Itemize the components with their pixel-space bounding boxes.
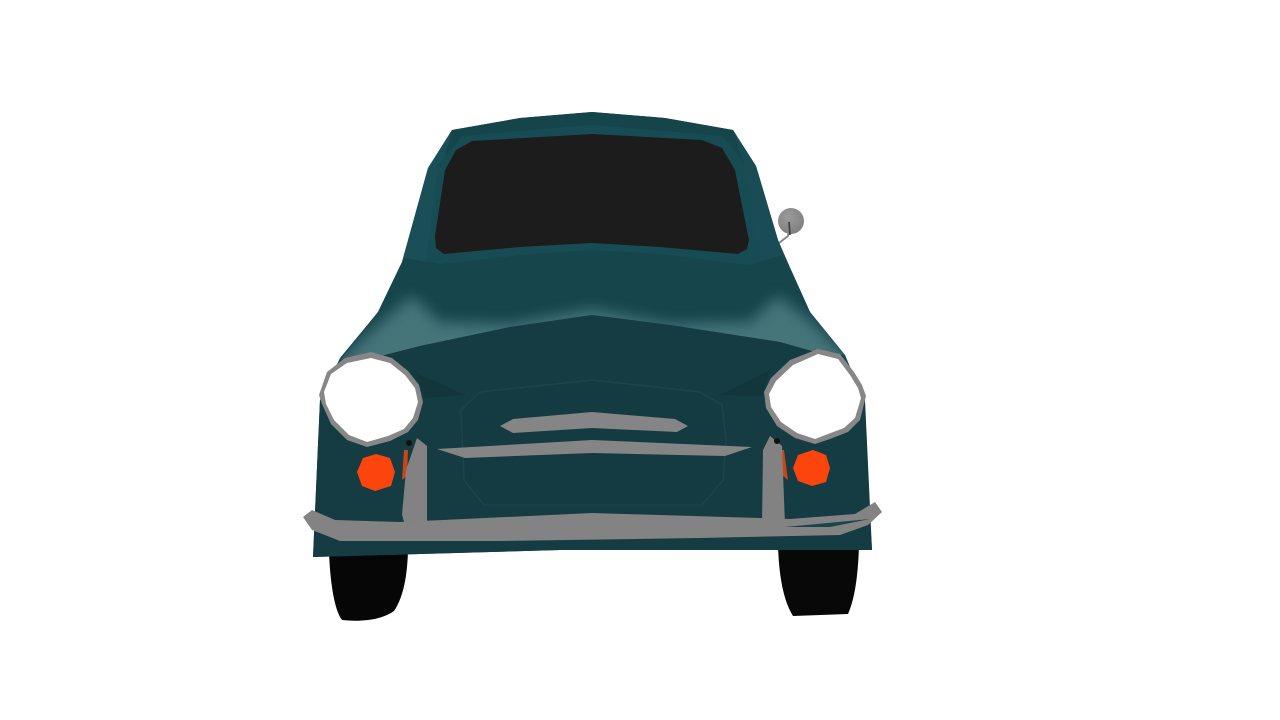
indicator: left <box>357 454 395 491</box>
headlight: right <box>764 349 866 444</box>
indicator: right <box>793 450 830 486</box>
bumper <box>303 502 882 541</box>
upright bolts <box>406 438 780 446</box>
bumper crease <box>785 519 870 527</box>
roof band <box>437 112 745 164</box>
grille panel <box>461 380 726 505</box>
wheels <box>329 546 859 621</box>
right upright <box>762 436 785 525</box>
orange indicator sides <box>402 450 788 480</box>
hood light band <box>340 294 844 360</box>
illustration: low-poly teal car, front view <box>303 112 882 621</box>
car body silhouette <box>313 112 872 557</box>
upper grille bar <box>500 412 688 433</box>
side mirror <box>778 208 804 243</box>
windscreen <box>435 134 749 254</box>
left wheel <box>329 552 408 621</box>
left upright <box>402 438 427 525</box>
windscreen surround <box>426 125 760 265</box>
right pillar <box>733 130 790 270</box>
left pillar <box>402 130 452 264</box>
lower grille bar <box>437 440 752 458</box>
front fascia <box>313 315 872 557</box>
headlight: left <box>319 352 423 447</box>
right wheel <box>778 546 859 616</box>
hood <box>340 250 845 360</box>
bumper uprights <box>402 436 785 525</box>
fascia shadow facets <box>415 370 770 398</box>
